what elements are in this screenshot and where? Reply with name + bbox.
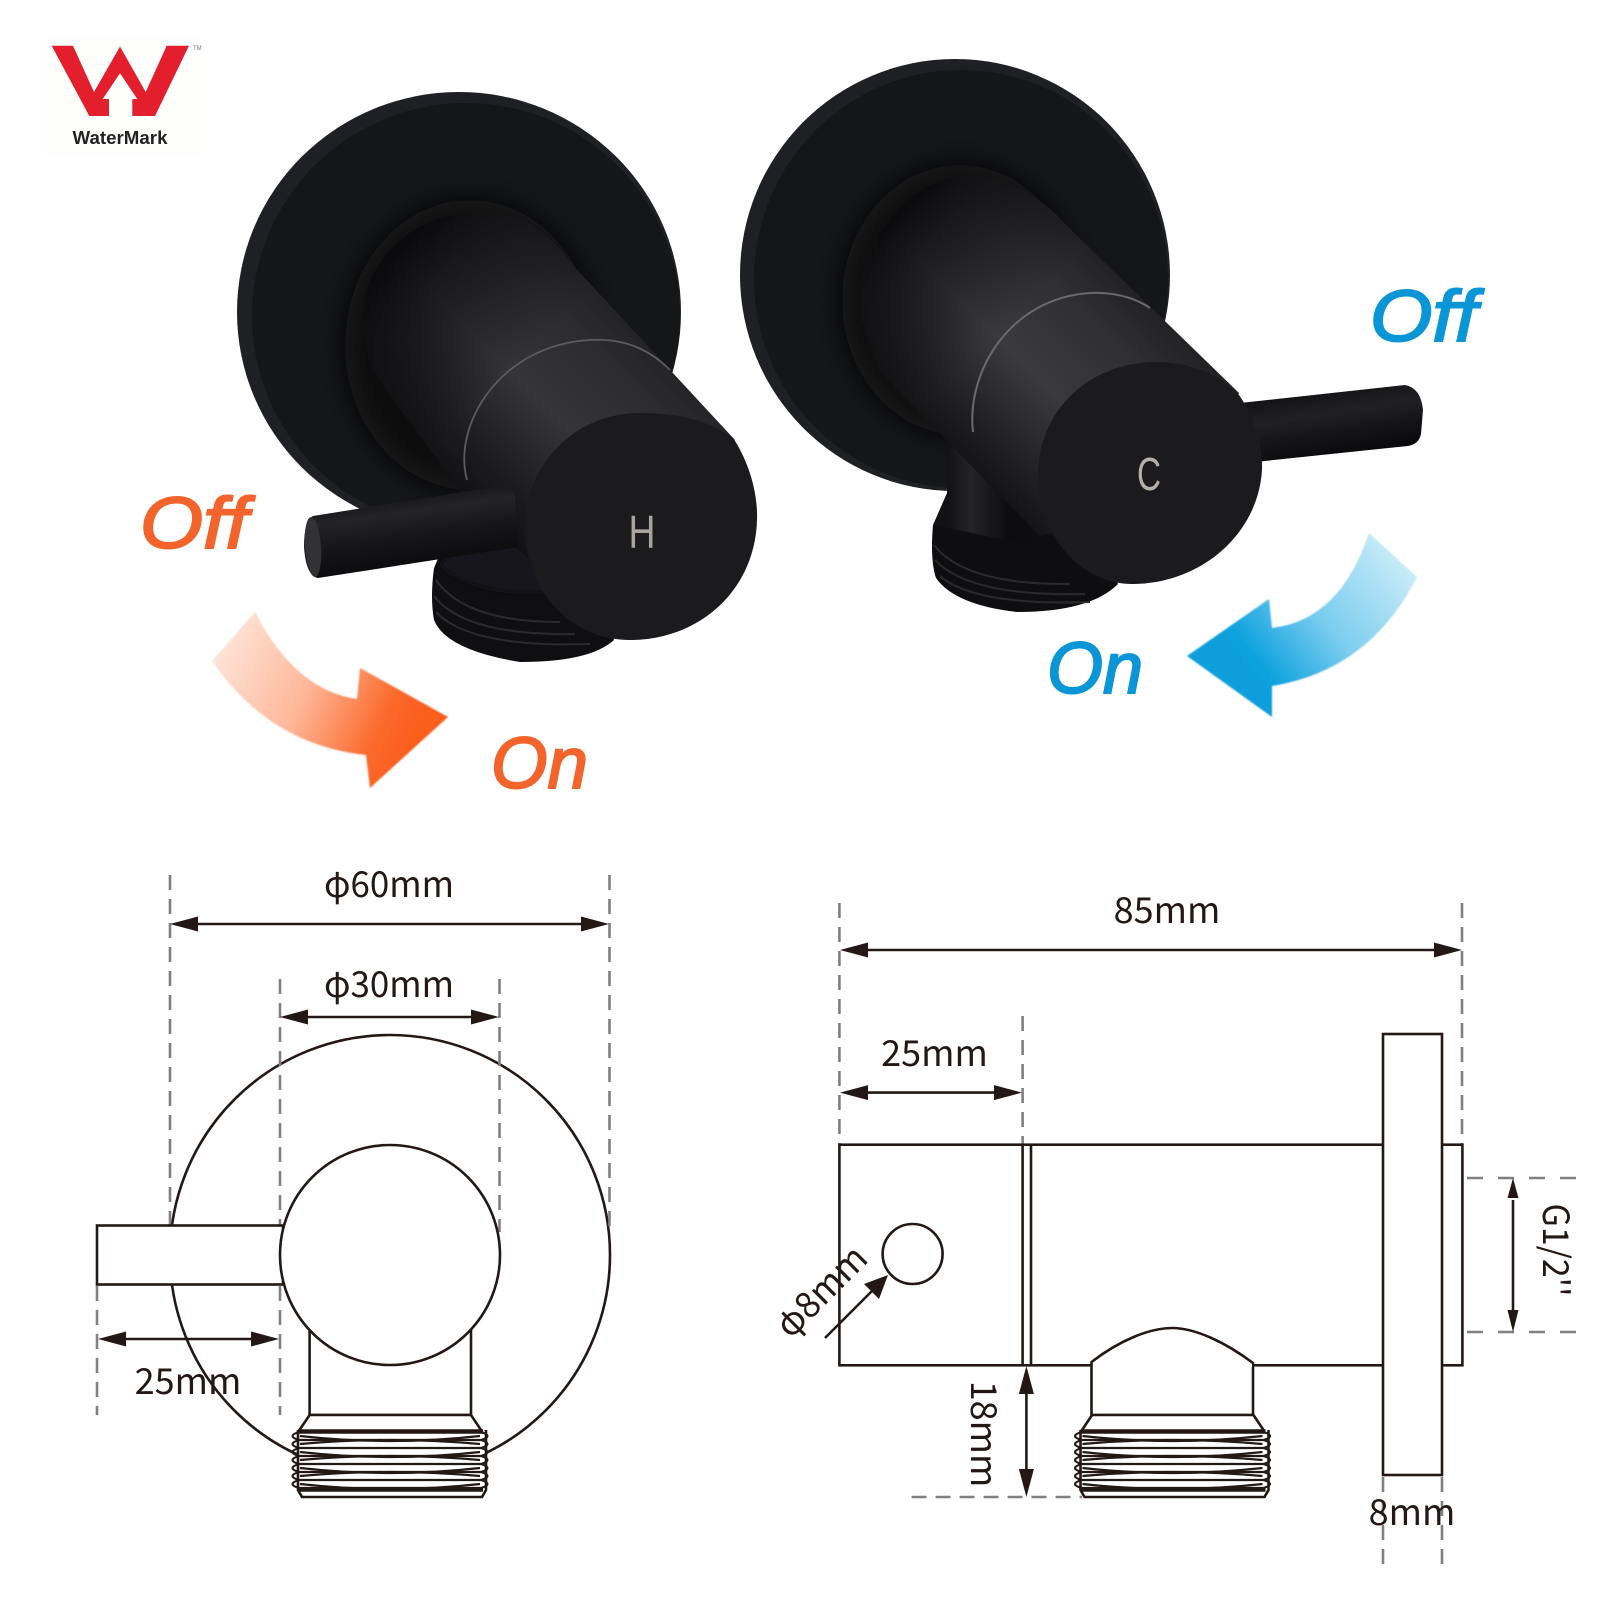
outlet neck: [933, 425, 1040, 545]
side view technical drawing: [762, 882, 1584, 1572]
WaterMark logo: [42, 36, 202, 156]
right valve: cold: [740, 59, 1423, 612]
dimension: handle 25mm: 25mm: [881, 1025, 988, 1077]
lever outline: [97, 1226, 283, 1284]
outlet stem: [310, 1320, 471, 1415]
dimension: handle 25mm: [840, 1025, 1022, 1100]
wall plate: [237, 92, 681, 532]
label: On hot: On: [491, 724, 588, 804]
dimension: 18mm: [960, 1366, 1034, 1497]
valve body: [859, 176, 1239, 536]
cap face: [525, 413, 757, 640]
wall plate: [740, 59, 1170, 491]
trademark mark: TM: [193, 46, 202, 52]
dimension: G1/2: [1508, 1178, 1584, 1332]
icon: red W with house arrow: [52, 46, 189, 116]
dimension: 85mm: [840, 882, 1462, 958]
dimension: phi30mm: [280, 956, 499, 1024]
thread: [292, 1415, 488, 1497]
label: On cold: On: [1047, 629, 1143, 709]
front view technical drawing: [97, 856, 610, 1497]
valve body: [362, 211, 735, 561]
arrow: hot turning direction: [212, 612, 448, 788]
dimension: G1/2: G1/2'': [1532, 1204, 1584, 1296]
dimension: phi60mm: φ60mm: [324, 856, 454, 908]
collar seam: [972, 293, 1150, 432]
dimension: lever 25mm: 25mm: [135, 1353, 241, 1405]
groove lines: [1023, 1145, 1031, 1365]
label: Off cold: Off: [1370, 277, 1485, 357]
lever handle: [303, 485, 518, 578]
logo wordmark: WaterMark: [72, 128, 169, 148]
wall flange outline: [1383, 1034, 1442, 1475]
arrow: cold turning direction: [1187, 533, 1417, 717]
letter H: H: [628, 506, 656, 558]
threaded outlet: [432, 530, 614, 662]
threaded outlet: [932, 490, 1118, 612]
dimension: lever 25mm: [98, 1332, 279, 1405]
dimension: phi8mm: φ8mm: [762, 1232, 878, 1348]
outlet dome: [1092, 1328, 1253, 1415]
letter C: C: [1137, 448, 1161, 500]
dimension: 85mm: 85mm: [1114, 882, 1220, 934]
collar seam: [464, 340, 670, 480]
lever handle: [1240, 385, 1423, 462]
dimension: phi30mm: φ30mm: [324, 956, 454, 1008]
cap face: [1038, 362, 1262, 584]
dimension: 8mm: 8mm: [1369, 1484, 1455, 1536]
left valve: hot: [237, 92, 757, 662]
dimension: phi60mm: [170, 856, 609, 932]
dimension: 18mm: 18mm: [960, 1381, 1012, 1487]
label: Off hot: Off: [140, 484, 256, 564]
outer plate circle: [170, 1035, 610, 1475]
handle hole: [883, 1224, 943, 1284]
valve body outline: [839, 1145, 1462, 1365]
outlet thread: [1075, 1415, 1270, 1497]
handle circle: [280, 1145, 500, 1365]
